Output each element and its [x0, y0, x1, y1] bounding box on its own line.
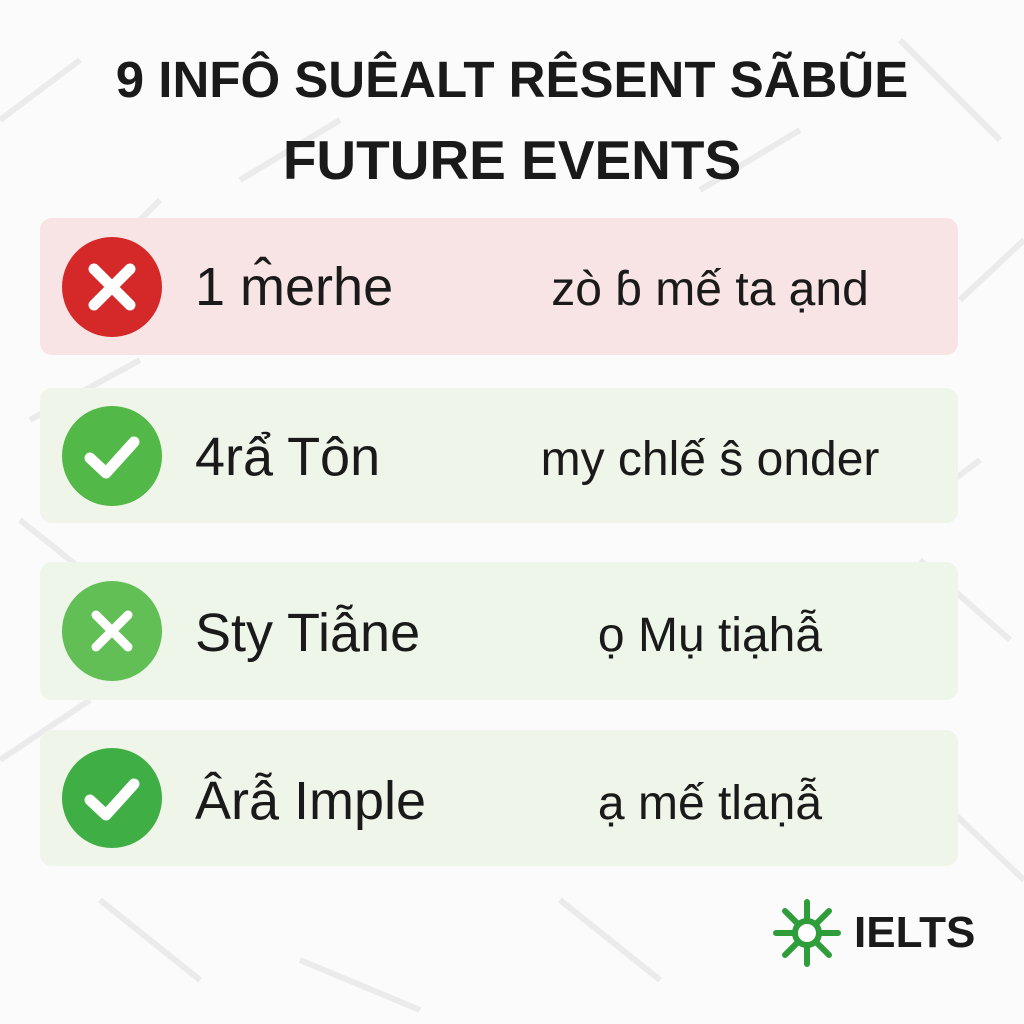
left text: Ârẫ Imple	[195, 771, 426, 831]
row 4	[40, 730, 958, 866]
title: 9 INFÔ SUÊALT RÊSENT SÃBŨE	[116, 51, 908, 108]
icon: red cross	[62, 237, 162, 337]
right text: my chlế ŝ onder	[541, 433, 879, 486]
icon: green check	[62, 406, 162, 506]
right text: zò ɓ mế ta ạnd	[551, 263, 869, 316]
row 1	[40, 218, 958, 355]
title	[116, 51, 908, 191]
row 3	[40, 562, 958, 700]
icon: green star	[773, 899, 841, 967]
right text: ọ Mụ tiạhẫ	[598, 609, 822, 662]
title: FUTURE EVENTS	[283, 129, 741, 191]
icon: green check	[62, 748, 162, 848]
left text: 4rẩ Tôn	[195, 427, 380, 487]
icon: green cross	[62, 581, 162, 681]
left text: 1 m̂erhe	[195, 257, 393, 317]
left text: Sty Tiẫne	[195, 603, 420, 663]
right text: ạ mế tlaṇẫ	[598, 777, 822, 830]
row 2	[40, 388, 958, 523]
logo: IELTS	[773, 899, 975, 967]
logo text: IELTS	[854, 908, 975, 957]
